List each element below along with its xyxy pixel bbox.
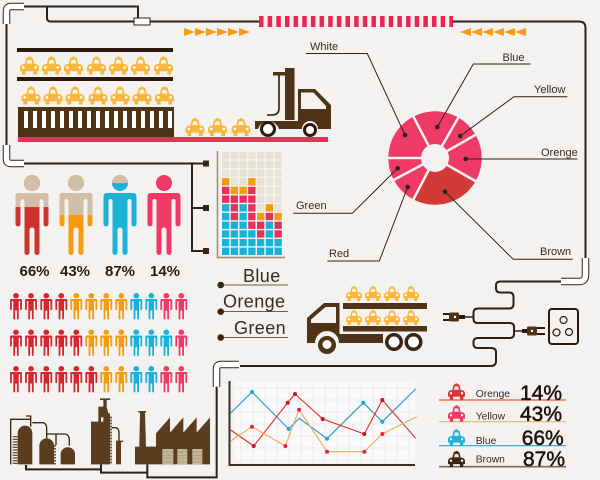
row: yellow (439, 403, 566, 426)
connector box (134, 18, 150, 25)
row: yellow: 43% (520, 403, 562, 426)
pipe elbow: left (6, 145, 24, 164)
distillation tower (91, 398, 123, 464)
forklift (255, 68, 331, 137)
percent labels: 87% (105, 263, 135, 280)
legend: blue orenge green (217, 266, 288, 341)
percent labels: 43% (60, 263, 90, 280)
figure 87% (104, 175, 136, 255)
delivery truck with taxis (307, 286, 427, 354)
row: orenge: Orenge (476, 389, 510, 400)
pipe elbow: top left (6, 6, 24, 24)
pink floor bar (18, 137, 328, 142)
row: orenge (439, 382, 566, 405)
row: blue: 66% (522, 427, 564, 450)
red dashed bar (259, 16, 453, 27)
figure 14% (148, 175, 180, 255)
warehouse shelves with taxis (17, 48, 174, 138)
factories (11, 398, 210, 464)
taxis on floor (186, 118, 250, 136)
connector nodes (203, 160, 209, 254)
plug: left (443, 312, 473, 322)
row: blue: Blue (476, 436, 497, 447)
legend: blue orenge green: Blue (243, 266, 281, 286)
pipe elbow: right (561, 258, 586, 282)
donut labels: Brown (540, 246, 571, 258)
donut labels: Red (329, 248, 349, 260)
refinery tanks (11, 416, 75, 464)
top wiring (6, 6, 586, 258)
row: yellow: Yellow (476, 411, 506, 422)
small people rows (10, 293, 187, 392)
donut leader dots (395, 125, 468, 194)
donut leader lines (293, 54, 577, 261)
percent labels: 14% (150, 263, 180, 280)
donut labels: Orenge (541, 147, 578, 159)
percent labels (19, 263, 180, 280)
legend: blue orenge green: Green (234, 318, 286, 338)
figure 66% (16, 175, 48, 255)
socket (549, 309, 578, 344)
row: orenge: 14% (520, 382, 562, 405)
legend with cars and percentages (439, 382, 566, 471)
bottom wiring (26, 387, 217, 477)
legend: blue orenge green: Orenge (223, 292, 285, 312)
stacked cell chart (218, 151, 285, 258)
donut chart (386, 111, 482, 205)
donut labels: Green (296, 200, 327, 212)
row: brown: 87% (523, 448, 565, 471)
donut labels: White (310, 41, 338, 53)
row: brown: Brown (476, 455, 505, 466)
serpentine cable (240, 282, 563, 366)
factory building (135, 411, 210, 464)
donut labels (296, 41, 578, 260)
arrows: orange right (184, 28, 250, 36)
figure 43% (60, 175, 92, 255)
row: brown (439, 448, 566, 471)
row: blue (439, 427, 566, 450)
donut labels: Blue (502, 52, 525, 64)
plug: right (514, 326, 545, 336)
people percent figures (16, 175, 180, 255)
pipe elbow: lower middle (216, 364, 239, 387)
donut labels: Yellow (534, 84, 565, 96)
arrows: orange left (460, 28, 526, 36)
line chart (230, 381, 417, 465)
percent labels: 66% (19, 263, 50, 280)
